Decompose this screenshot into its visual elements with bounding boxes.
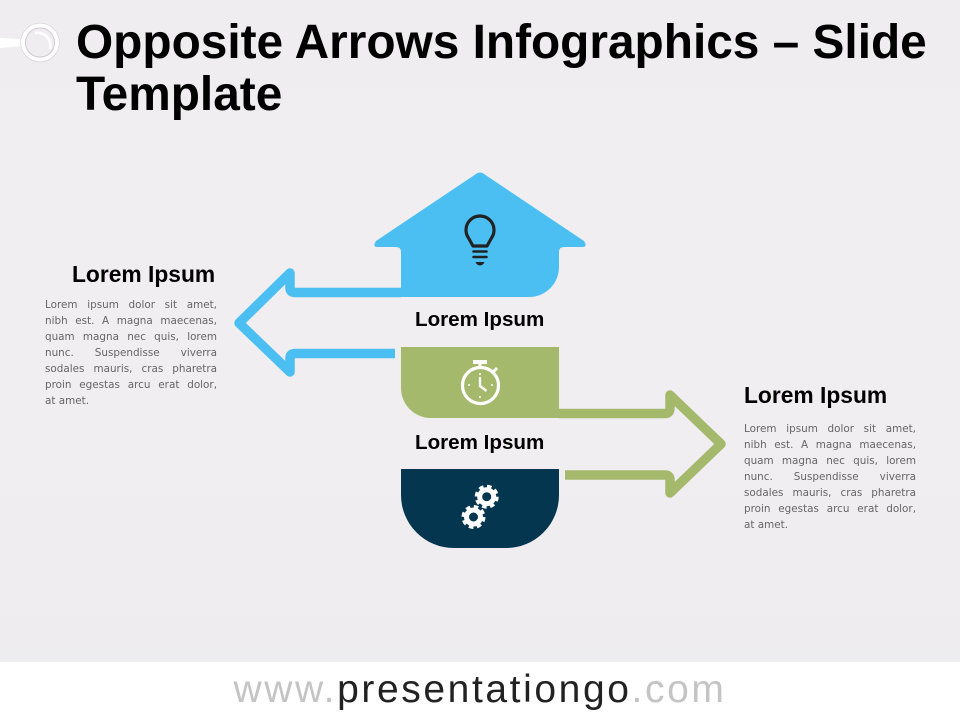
title xyxy=(76,16,927,121)
text block: right: Lorem ipsum dolor sit amet, xyxy=(744,423,916,435)
heading: left: Lorem Ipsum xyxy=(72,261,215,287)
green right outline arrow xyxy=(559,395,721,493)
footer url: www.presentationgo.com xyxy=(234,668,726,711)
title: Opposite Arrows Infographics – Slide xyxy=(76,16,927,69)
text block: left: nibh est. A magna maecenas, xyxy=(45,315,217,327)
text block: right: nibh est. A magna maecenas, xyxy=(744,439,916,451)
text block: right xyxy=(744,423,916,531)
logo ring icon xyxy=(0,22,60,62)
heading: center top: Lorem Ipsum xyxy=(415,308,544,331)
icon: stopwatch xyxy=(462,362,498,404)
blue house arrow block xyxy=(374,172,586,297)
heading: center bottom: Lorem Ipsum xyxy=(415,431,544,454)
blue left outline arrow xyxy=(239,273,401,372)
heading: right: Lorem Ipsum xyxy=(744,382,887,408)
text block: left xyxy=(45,299,217,407)
icon: light bulb xyxy=(466,216,494,266)
text block: left: nunc. Suspendisse viverra xyxy=(45,347,217,359)
text block: right: at amet. xyxy=(744,519,788,531)
icon: gears xyxy=(463,486,497,528)
text block: right: quam magna nec quis, lorem xyxy=(744,455,916,467)
text block: left: proin egestas arcu erat dolor, xyxy=(45,379,217,391)
text block: left: sodales mauris, cras pharetra xyxy=(45,363,217,375)
text block: left: Lorem ipsum dolor sit amet, xyxy=(45,299,217,311)
text block: right: nunc. Suspendisse viverra xyxy=(744,471,916,483)
green block xyxy=(401,347,600,418)
text block: left: quam magna nec quis, lorem xyxy=(45,331,217,343)
dark block xyxy=(401,469,559,548)
text block: right: proin egestas arcu erat dolor, xyxy=(744,503,916,515)
text block: right: sodales mauris, cras pharetra xyxy=(744,487,916,499)
title: Template xyxy=(76,68,282,121)
text block: left: at amet. xyxy=(45,395,89,407)
